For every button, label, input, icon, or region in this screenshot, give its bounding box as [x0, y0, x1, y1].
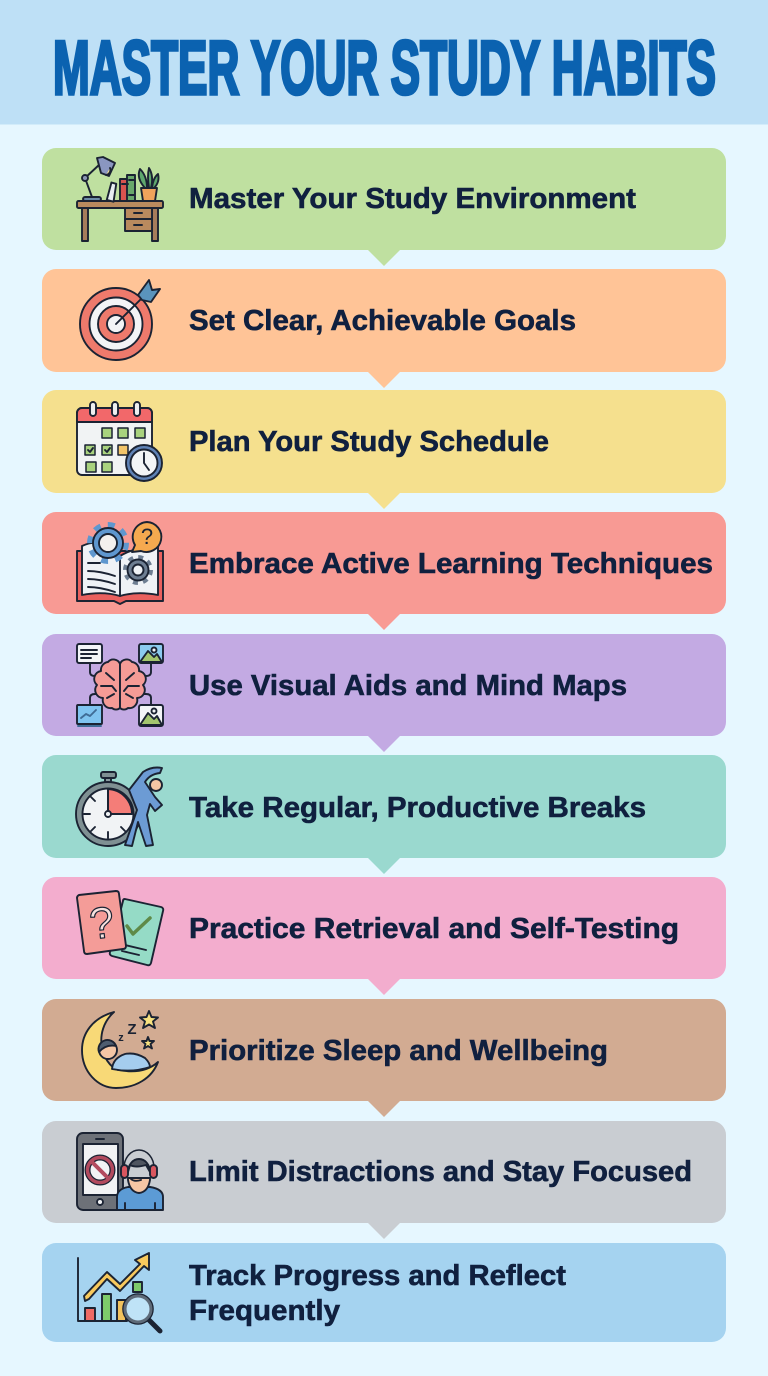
- panel background: [42, 390, 726, 509]
- panel background: [42, 877, 726, 995]
- icon: growth chart and magnifier: [78, 1253, 160, 1331]
- icon: brain with connected visuals: [77, 644, 163, 726]
- panel background: [42, 999, 726, 1117]
- icon: open book with gears: ?: [141, 524, 153, 549]
- icon: moon with sleeping person: z: [118, 1032, 124, 1044]
- panel background: [42, 1121, 726, 1239]
- panel: study environment: [42, 148, 726, 266]
- panel background: [42, 148, 726, 266]
- icon: stopwatch and stretching figure: [76, 768, 162, 846]
- icon: desk with lamp, books and plant: [77, 157, 163, 241]
- panel background: [42, 1243, 726, 1342]
- icon: phone and person with headset: [77, 1133, 163, 1210]
- label: Practice Retrieval and Self-Testing: [189, 913, 679, 945]
- header band: [0, 0, 768, 124]
- label: Plan Your Study Schedule: [189, 426, 549, 458]
- icon: open book with gears: [77, 522, 163, 604]
- label: Track Progress and Reflect: [189, 1260, 566, 1292]
- panel background: [42, 634, 726, 752]
- icon: calendar and clock: [77, 402, 162, 481]
- label: Prioritize Sleep and Wellbeing: [189, 1035, 608, 1067]
- label: Master Your Study Environment: [189, 183, 636, 215]
- panel: breaks: [42, 755, 726, 874]
- panel background: [42, 512, 726, 630]
- panel background: [42, 269, 726, 388]
- label: Embrace Active Learning Techniques: [189, 548, 713, 580]
- panel: active learning: [42, 512, 726, 630]
- panel: distractions: [42, 1121, 726, 1239]
- panel: schedule: [42, 390, 726, 509]
- icon: target with arrow: [80, 280, 160, 360]
- icon: moon with sleeping person: [82, 1011, 158, 1088]
- label: Limit Distractions and Stay Focused: [189, 1156, 692, 1188]
- panel: goals: [42, 269, 726, 388]
- icon: question and check cards: ?: [87, 898, 117, 949]
- panel background: [42, 755, 726, 874]
- label: Use Visual Aids and Mind Maps: [189, 670, 627, 702]
- label: Take Regular, Productive Breaks: [189, 792, 646, 824]
- panel: sleep: [42, 999, 726, 1117]
- icon: moon with sleeping person: Z: [127, 1021, 137, 1038]
- label: Set Clear, Achievable Goals: [189, 305, 576, 337]
- panel: track progress: [42, 1243, 726, 1342]
- label second line: Frequently: [189, 1295, 340, 1327]
- icon: question and check cards: [77, 891, 163, 965]
- panel: visual aids: [42, 634, 726, 752]
- panel: retrieval: [42, 877, 726, 995]
